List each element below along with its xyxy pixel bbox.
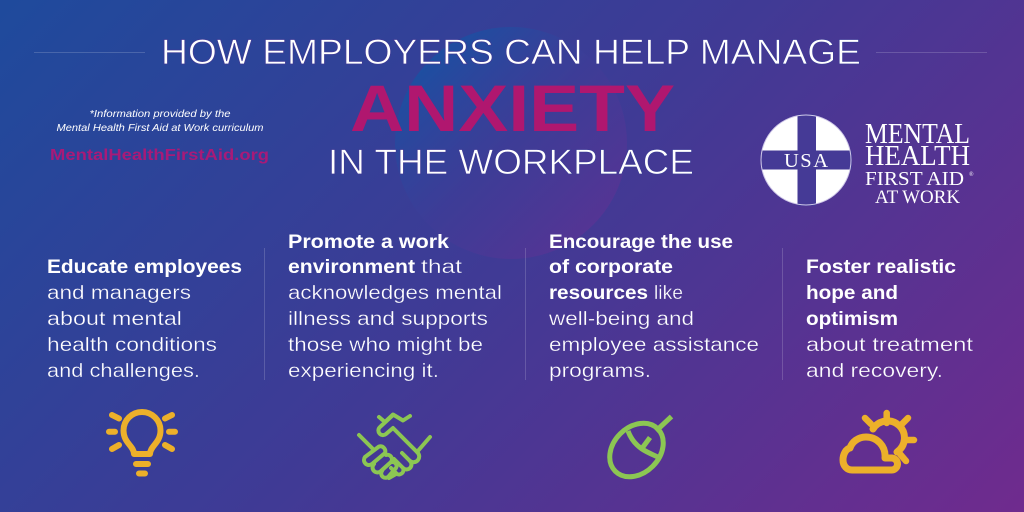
column 4 text: and recovery. — [806, 360, 943, 382]
logo wordmark: FIRST AID — [865, 168, 964, 190]
column 2 text: experiencing it. — [288, 360, 439, 382]
column 1 text: and challenges. — [47, 360, 200, 382]
column 4 text: optimism — [806, 308, 898, 330]
column 3 text: employee assistance — [549, 334, 759, 356]
title line one: HOW EMPLOYERS CAN HELP MANAGE — [161, 33, 861, 72]
column 3: encourage corporate resources — [548, 231, 759, 487]
logo wordmark: ® — [969, 171, 974, 178]
column 4 text: Foster realistic — [806, 256, 956, 278]
column 4 text: about treatment — [806, 334, 974, 356]
column 3 text: of corporate — [549, 256, 673, 278]
logo wordmark: MENTAL — [865, 118, 970, 150]
source note text line two: Mental Health First Aid at Work curriculum — [56, 122, 264, 134]
website link: MentalHealthFirstAid.org — [50, 147, 269, 164]
logo wordmark — [865, 118, 974, 208]
source note text: *Information provided by the — [90, 108, 231, 120]
icon: handshake — [359, 414, 430, 478]
column 2 text: Promote a work — [288, 231, 449, 253]
column 3 text: Encourage the use — [549, 231, 733, 253]
column 2 text: illness and supports — [288, 308, 488, 330]
column 4: foster realistic hope — [806, 256, 974, 470]
column 3 text: programs. — [549, 360, 651, 382]
logo: Mental Health First Aid USA at Work — [761, 114, 974, 208]
column 3 text: well-being and — [548, 308, 694, 330]
title keyword: anxiety: ANXIETY — [350, 71, 675, 145]
column 1 text: health conditions — [47, 334, 217, 356]
column 1 text: about mental — [47, 308, 182, 330]
icon: light bulb — [109, 412, 175, 474]
source note — [50, 108, 269, 164]
column 2 text: acknowledges mental — [288, 282, 502, 304]
logo wordmark: AT WORK — [875, 188, 961, 208]
column 3 text — [548, 231, 759, 382]
column 1 text: and managers — [47, 282, 191, 304]
logo emblem: USA — [784, 150, 828, 172]
title line three: IN THE WORKPLACE — [328, 143, 694, 182]
icon: computer mouse — [599, 413, 674, 487]
column 2 text: those who might be — [288, 334, 483, 356]
column 2 text: that — [421, 256, 463, 278]
column 4 text — [806, 256, 974, 382]
column 2: promote a work environment — [288, 231, 502, 478]
column 2 text: environment — [288, 256, 416, 278]
column 3 text: like — [654, 282, 683, 304]
column 1 text: Educate employees — [47, 256, 242, 278]
title — [161, 33, 861, 182]
icon: sun behind cloud — [843, 413, 914, 470]
column 4 text: hope and — [806, 282, 898, 304]
column 3 text: resources — [549, 282, 648, 304]
column 2 text — [288, 231, 502, 382]
logo emblem — [761, 114, 852, 206]
logo wordmark: HEALTH — [865, 140, 970, 172]
column 1: educate employees — [47, 256, 242, 474]
column 1 text — [47, 256, 242, 382]
